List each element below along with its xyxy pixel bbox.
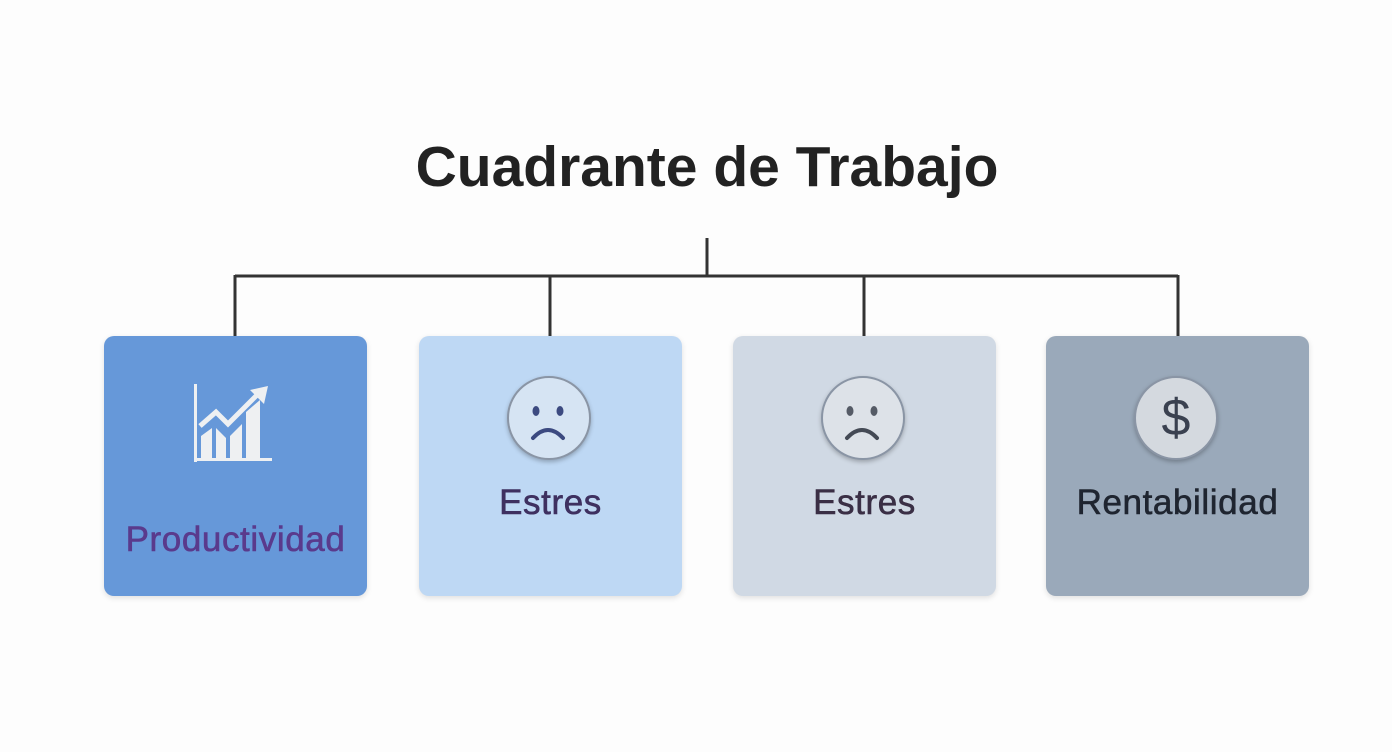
panel: estres 1 [419,336,682,596]
panel: productividad [104,336,367,596]
icon: growth chart [194,384,272,462]
icon: dollar coin [1134,376,1218,460]
title: Cuadrante de Trabajo [416,135,998,199]
icon: dollar coin: $ [1162,389,1190,447]
icon: sad face [821,376,905,460]
panel: estres 2 [733,336,996,596]
panel: rentabilidad [1046,336,1309,596]
label: Estres [499,483,602,522]
label: Rentabilidad [1077,483,1278,522]
icon: sad face [507,376,591,460]
label: Productividad [126,520,345,559]
label: Estres [813,483,916,522]
